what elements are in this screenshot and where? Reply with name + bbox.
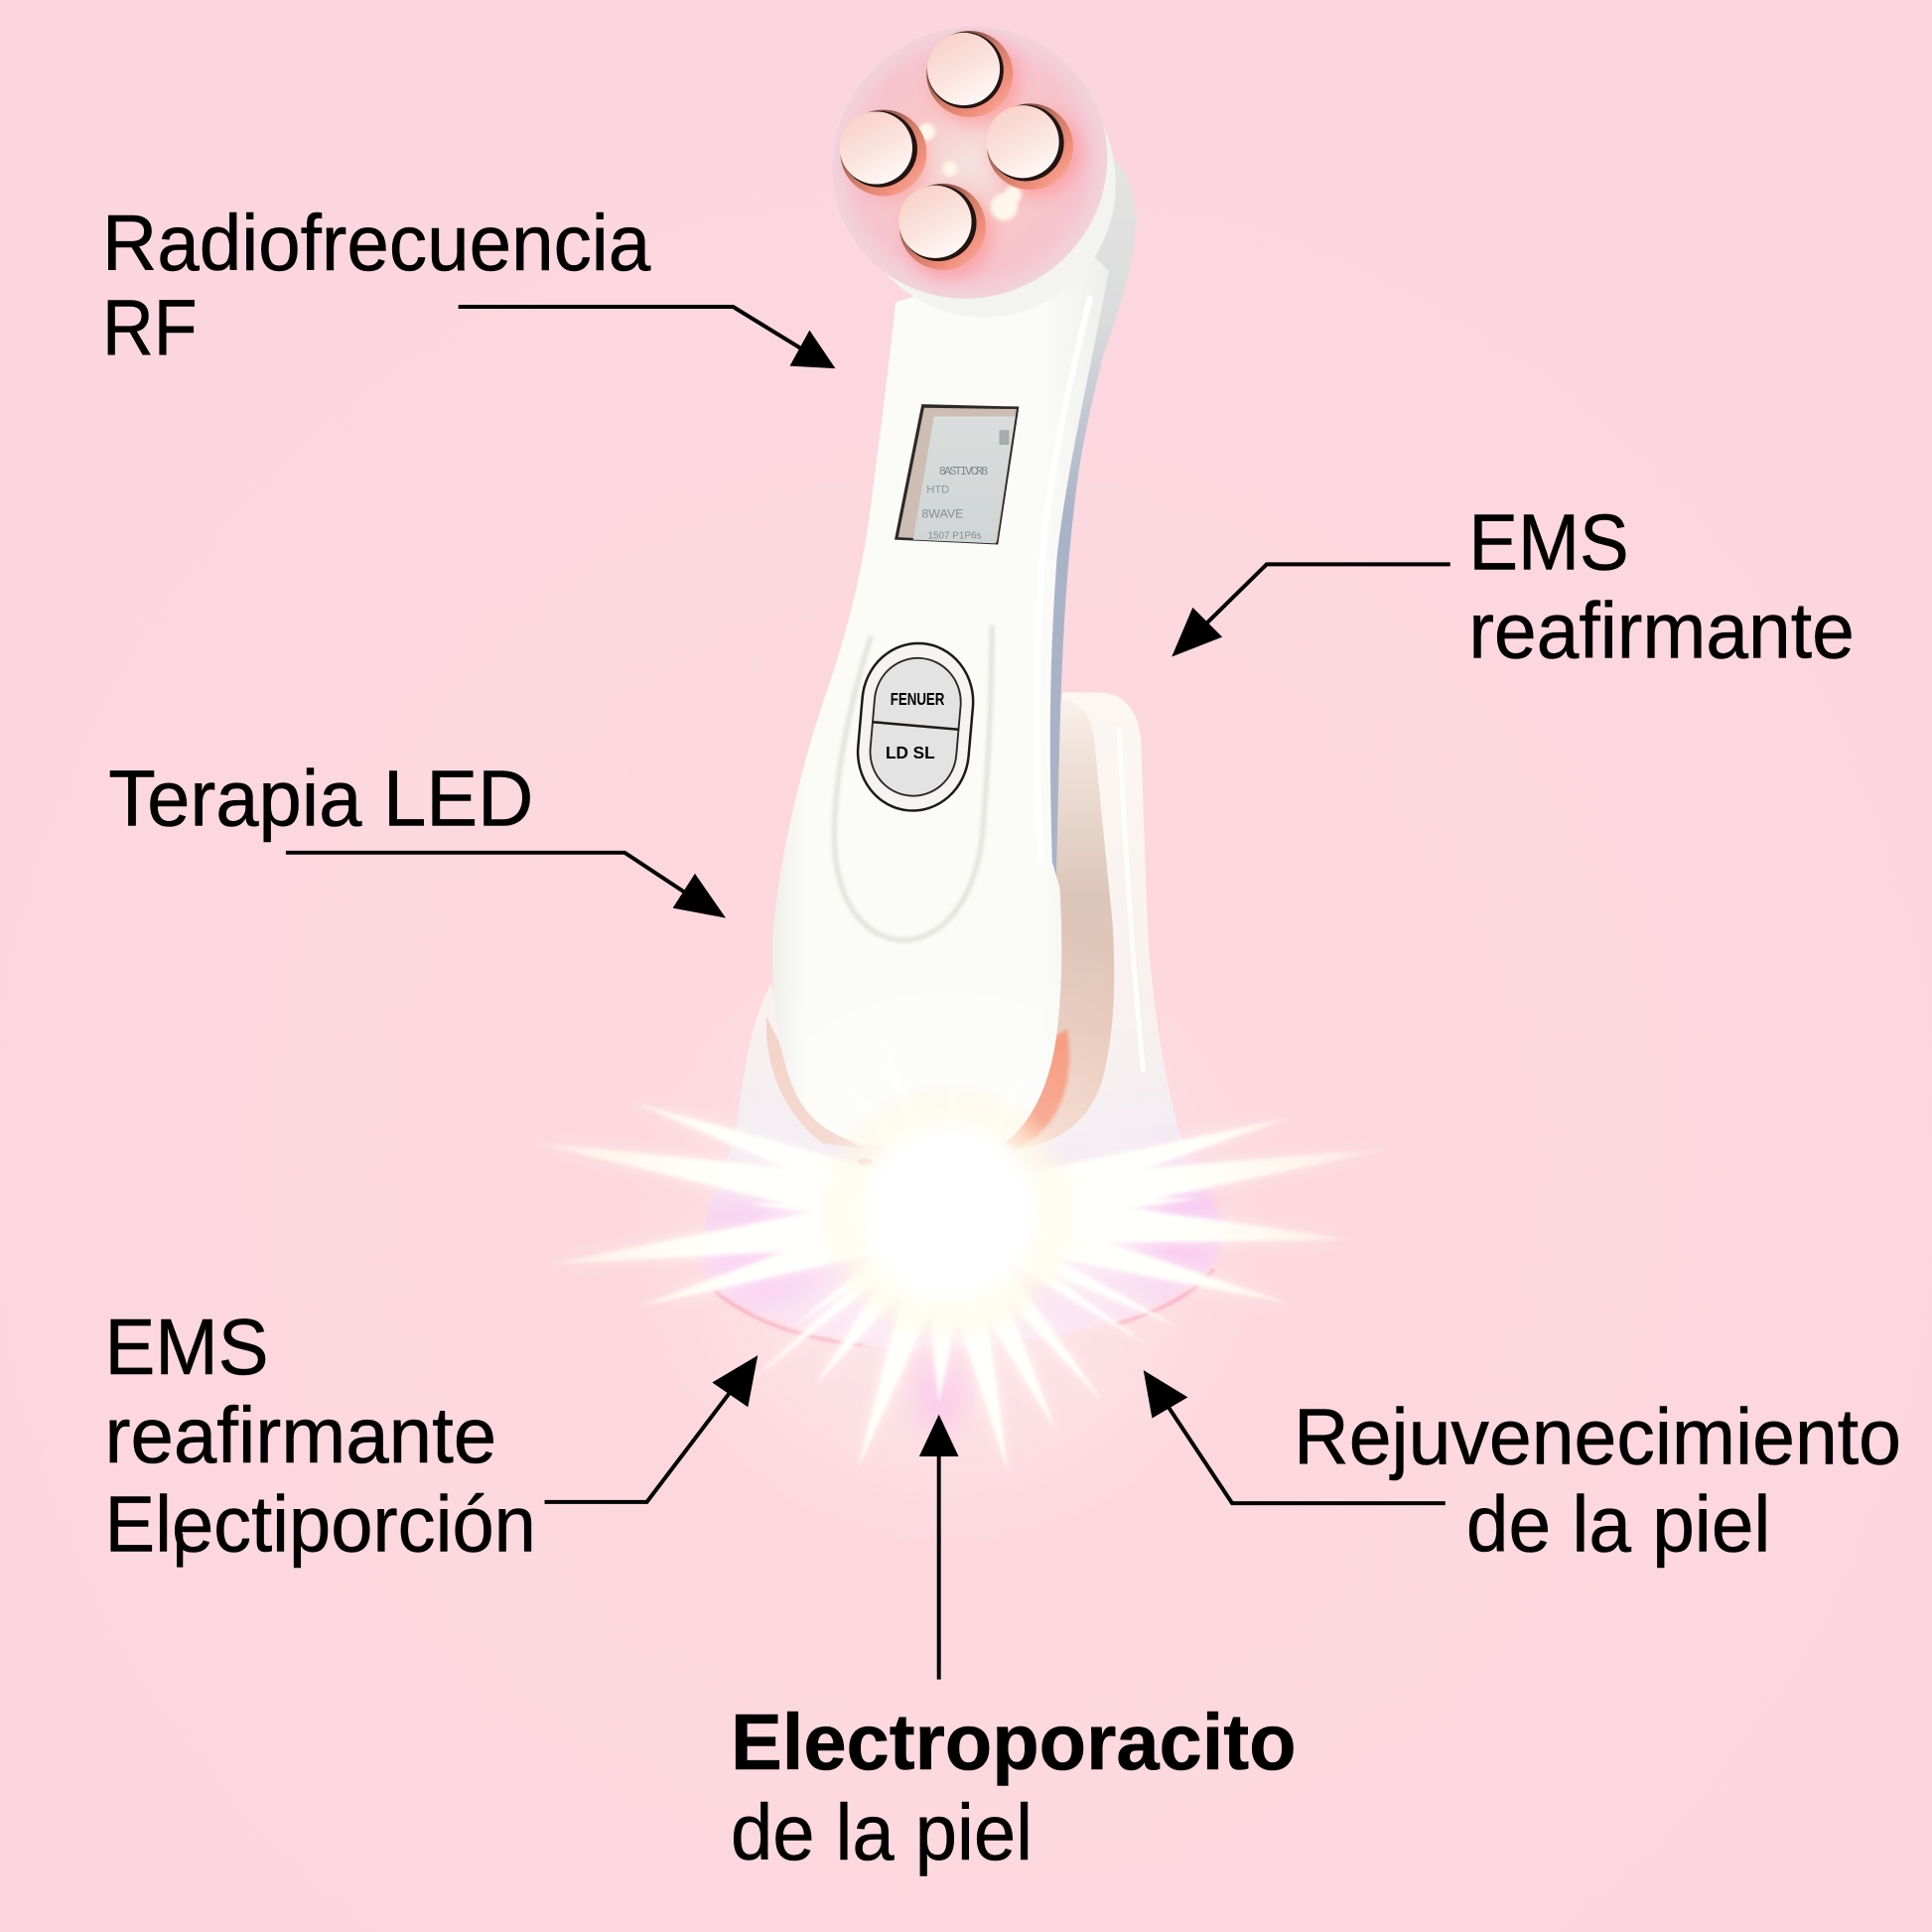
- dock left cup: [766, 1017, 863, 1149]
- arrow: EMS reafirmante (right): [1172, 564, 1450, 656]
- label: Rejuvenecimiento de la piel: Rejuvenecimiento: [1294, 1392, 1901, 1480]
- electrode red glow: [853, 37, 1082, 278]
- electrode right: [986, 103, 1073, 190]
- device: handle body: [772, 246, 1109, 1146]
- arrow: Rejuvenecimiento: [1144, 1370, 1446, 1503]
- LCD screen: 1507 P1P6s: [928, 530, 982, 541]
- burst halo: [628, 911, 1269, 1553]
- label: Electroporacito de la piel: Electroporacito: [731, 1698, 1297, 1786]
- dock small dot: [858, 1159, 873, 1166]
- button recess groove: [834, 624, 992, 940]
- label: EMS reafirmante (right): reafirmante: [1468, 587, 1855, 675]
- dock orange crescent: [1001, 1029, 1069, 1150]
- head disk: [778, 0, 1161, 352]
- label: EMS reafirmante Electiporción: [104, 1303, 536, 1569]
- light burst: [532, 911, 1392, 1553]
- LCD screen: HTD: [926, 483, 949, 495]
- control button pill: FENUER: [891, 689, 945, 709]
- LED glow spots: [901, 123, 1022, 229]
- dock highlight: [1119, 727, 1144, 1072]
- arrow: Electroporación center: [919, 1415, 959, 1680]
- burst rays: [532, 1041, 1392, 1472]
- label: EMS reafirmante (right): EMS: [1468, 497, 1629, 586]
- label: Electroporacito de la piel: de la piel: [731, 1788, 1033, 1876]
- label: EMS reafirmante Electiporción: reafirmante: [104, 1391, 496, 1479]
- label: EMS reafirmante Electiporción: Electiporción: [104, 1480, 536, 1569]
- arrow: Terapia LED: [286, 853, 726, 918]
- control button pill: LD SL: [886, 743, 935, 762]
- dock inner recess: [1004, 699, 1114, 1151]
- label: EMS reafirmante Electiporción: EMS: [104, 1303, 269, 1391]
- label: Radiofrecuencia RF: [102, 199, 651, 371]
- device: grey back stripe: [1047, 160, 1136, 888]
- lilac glow below burst: [899, 1330, 978, 1453]
- arrow: EMS reafirmante left: [545, 1355, 758, 1502]
- LCD screen: 8WAVE: [921, 506, 963, 520]
- dock lilac glow left: [696, 1195, 832, 1318]
- label: Radiofrecuencia RF: RF: [102, 283, 198, 371]
- electrode top: [926, 31, 1013, 117]
- electrode left: [840, 109, 926, 196]
- device: white collar: [803, 1, 1161, 361]
- arrow: Radiofrecuencia: [459, 307, 835, 368]
- burst ray glow: [532, 1041, 1392, 1472]
- burst core: [816, 1080, 1082, 1346]
- label: Rejuvenecimiento de la piel: [1294, 1392, 1901, 1569]
- label: Radiofrecuencia RF: Radiofrecuencia: [102, 199, 651, 287]
- dock lilac glow right: [1111, 1121, 1230, 1307]
- LCD screen: 8ASTIVCR8: [939, 465, 988, 479]
- label: EMS reafirmante (right): [1468, 497, 1855, 675]
- electrode bottom: [898, 184, 986, 270]
- LCD screen: [895, 404, 1019, 545]
- device: RF head: [778, 0, 1161, 352]
- device: charging dock: [696, 692, 1230, 1348]
- control button pill: [853, 638, 978, 815]
- body highlight: [1036, 296, 1090, 863]
- label: Electroporacito de la piel: [731, 1698, 1297, 1876]
- dock rim shadow: [715, 1269, 1213, 1345]
- label: Rejuvenecimiento de la piel: de la piel: [1466, 1480, 1770, 1569]
- label: Terapia LED: Terapia LED: [108, 755, 533, 843]
